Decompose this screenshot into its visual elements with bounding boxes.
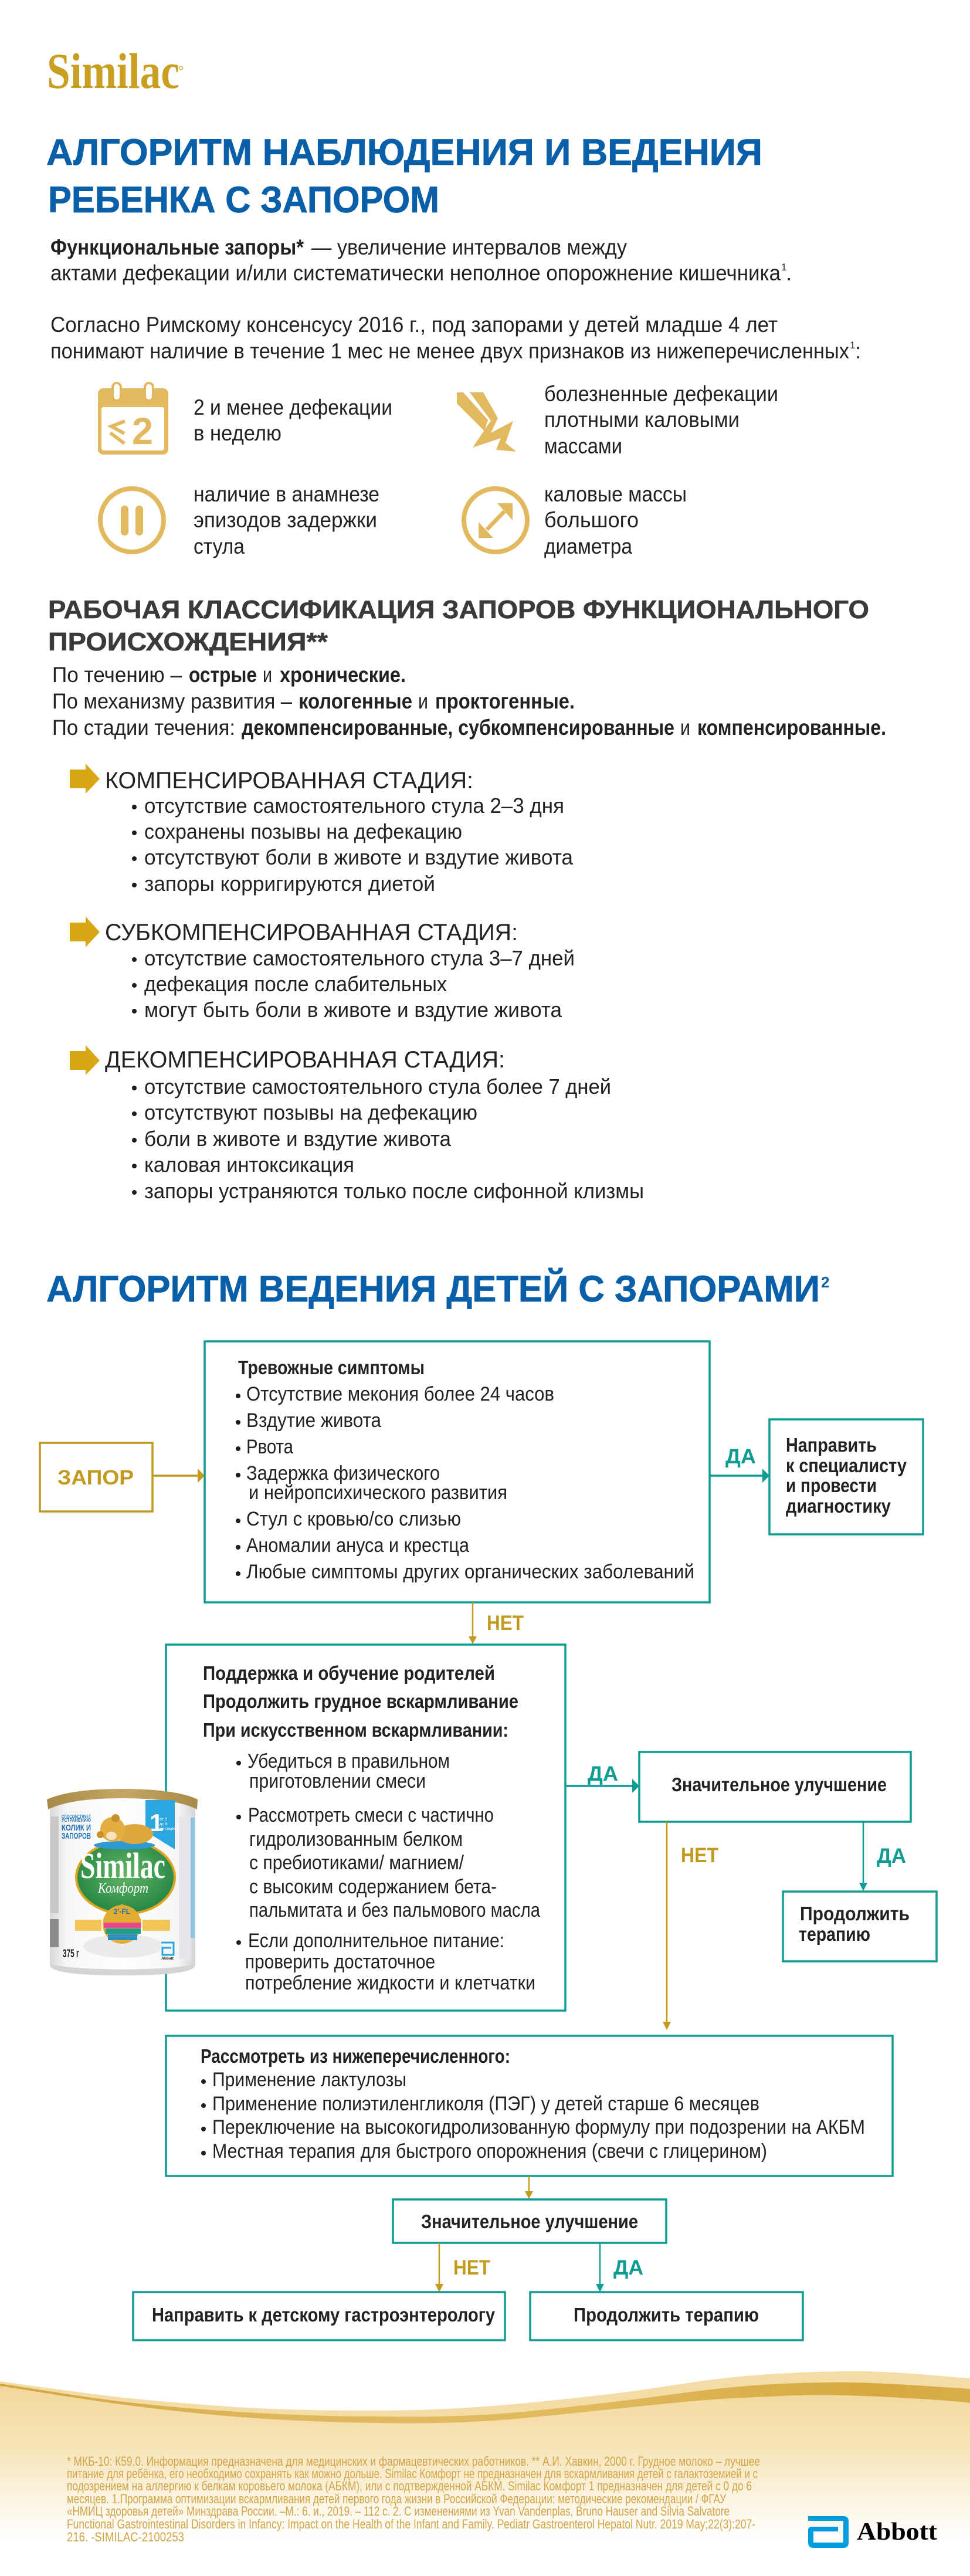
arrow: yes to continue therapy 2: ДА — [613, 2256, 643, 2279]
footnotes: Functional Gastrointestinal Disorders in Infancy: Impact on the Health of the Infant and Family. Pediatr Gastroenterol Hepatol Nutr. 2019 May;22(3):207- — [67, 2517, 755, 2531]
title: АЛГОРИТМ НАБЛЮДЕНИЯ И ВЕДЕНИЯ — [46, 132, 762, 173]
panel: consider options — [166, 2036, 893, 2176]
panel: parent support: с пребиотиками/ магнием/ — [249, 1852, 464, 1874]
panel: parent support: Рассмотреть смеси с частично — [248, 1804, 494, 1826]
panel: subcompensated stage: дефекация после слабительных — [144, 972, 447, 996]
image: Similac Comfort formula can: от 0 — [160, 1818, 167, 1822]
image: Similac Comfort formula can: ЗАПОРОВ — [62, 1831, 91, 1841]
arrow: yes to continue therapy: ДА — [877, 1845, 906, 1867]
image: Similac Comfort formula can: до 6 — [160, 1822, 168, 1826]
arrow: yes to continue therapy — [859, 1822, 906, 1891]
panel: alarm symptoms — [205, 1341, 710, 1602]
text block: Rome consensus: Согласно Римскому консенсусу 2016 г., под запорами у детей младше 4 лет — [50, 313, 778, 337]
icon: lightning — [457, 392, 516, 452]
text block: definition: Функциональные запоры* — [50, 235, 304, 259]
image: Similac Comfort formula can: Abbott — [161, 1956, 174, 1961]
panel: parent support: приготовлении смеси — [249, 1770, 426, 1792]
panel: parent support: Убедиться в правильном — [247, 1750, 450, 1772]
panel: compensated stage: КОМПЕНСИРОВАННАЯ СТАДИЯ: — [105, 768, 473, 794]
text block: definition: — увеличение интервалов между — [311, 235, 627, 259]
footnotes: * МКБ-10: К59.0. Информация предназначена для медицинских и фармацевтических работников. ** А.И. Хавкин, 2000 г. Грудное молоко – лучшее — [67, 2454, 760, 2469]
text: 2 or fewer — [194, 395, 392, 445]
panel: compensated stage — [70, 764, 574, 896]
text block: classification criteria: и — [263, 663, 272, 687]
panel: decompensated stage — [70, 1045, 644, 1203]
panel: alarm symptoms: Стул с кровью/со слизью — [246, 1508, 461, 1530]
panel: decompensated stage: отсутствие самостоятельного стула более 7 дней — [144, 1075, 611, 1099]
heading: management algorithm: АЛГОРИТМ ВЕДЕНИЯ ДЕТЕЙ С ЗАПОРАМИ — [46, 1268, 820, 1310]
arrow: stage marker — [70, 917, 100, 947]
arrow: no to parent support — [469, 1602, 524, 1644]
arrow: no to parent support: НЕТ — [487, 1612, 524, 1635]
panel: parent support: проверить достаточное — [245, 1951, 435, 1973]
footnotes: «НМИЦ здоровья детей» Минздрава России. –М.: 6. и., 2019. – 112 с. 2. С изменениями из Yvan Vandenplas, Bruno Hauser and Silvia Salvatore — [67, 2504, 730, 2519]
image: Similac Comfort formula can: 375 г — [63, 1948, 79, 1960]
text block: classification criteria: хронические. — [280, 663, 406, 687]
panel: decompensated stage: запоры устраняются только после сифонной клизмы — [144, 1179, 644, 1203]
text: delay episodes: эпизодов задержки — [194, 508, 377, 532]
text: large diameter: диаметра — [544, 534, 632, 558]
panel: parent support: пальмитата и без пальмового масла — [249, 1899, 540, 1921]
text: 2 or fewer: в неделю — [194, 421, 281, 445]
panel: parent support: Если дополнительное питание: — [248, 1930, 504, 1952]
logo: Abbott — [808, 2516, 937, 2548]
arrow: yes to specialist: ДА — [725, 1445, 756, 1468]
panel: subcompensated stage: отсутствие самостоятельного стула 3–7 дней — [144, 946, 575, 970]
panel: decompensated stage: ДЕКОМПЕНСИРОВАННАЯ СТАДИЯ: — [105, 1047, 505, 1073]
box: continue therapy 2 — [530, 2292, 803, 2340]
text block: Rome consensus: понимают наличие в течение 1 мес не менее двух признаков из нижеперечисленных — [50, 339, 849, 363]
footnotes: питание для ребёнка, его необходимо сохранять как можно дольше. Similac Комфорт не предназначен для вскармливания детей с галактоземией и с — [67, 2466, 758, 2481]
image: Similac Comfort formula can: 1 — [150, 1809, 163, 1836]
text block: definition: 1 — [781, 262, 786, 273]
panel: alarm symptoms: Задержка физического — [246, 1462, 440, 1484]
text: delay episodes — [194, 482, 379, 558]
box: continue therapy: Продолжить — [800, 1903, 910, 1924]
arrow: yes to improvement: ДА — [588, 1762, 618, 1785]
title — [46, 132, 762, 221]
panel: parent support: Продолжить грудное вскармливание — [203, 1690, 518, 1712]
panel: decompensated stage: отсутствуют позывы на дефекацию — [144, 1100, 477, 1124]
box: refer to specialist: диагностику — [786, 1495, 891, 1517]
box: constipation start: ЗАПОР — [57, 1466, 134, 1489]
box: significant improvement 2 — [393, 2199, 666, 2243]
icon: pause — [100, 489, 164, 552]
panel: alarm symptoms: Любые симптомы других органических заболеваний — [246, 1561, 694, 1583]
panel: parent support — [166, 1645, 565, 2011]
icon: calendar — [98, 383, 168, 455]
box: significant improvement: Значительное улучшение — [671, 1774, 887, 1795]
text block: classification criteria: декомпенсированные, субкомпенсированные — [242, 716, 674, 740]
image: Similac Comfort formula can: Similac — [80, 1846, 165, 1886]
arrow: stage marker — [70, 1045, 100, 1075]
text block: classification criteria: По механизму развития – — [52, 689, 292, 713]
panel: alarm symptoms: Рвота — [246, 1436, 293, 1458]
heading: management algorithm: 2 — [821, 1273, 829, 1291]
icon: diameter arrow — [464, 489, 527, 552]
panel: parent support: При искусственном вскармливании: — [203, 1719, 508, 1741]
panel: consider options: Применение лактулозы — [212, 2069, 406, 2091]
text: delay episodes: наличие в анамнезе — [194, 482, 379, 506]
image: Similac Comfort formula can: месяцев — [160, 1827, 176, 1831]
text block: definition: актами дефекации и/или систематически неполное опорожнение кишечника — [50, 261, 781, 285]
arrow: options to improvement — [525, 2176, 533, 2199]
arrow: no to further options — [663, 1822, 718, 2030]
panel: subcompensated stage: СУБКОМПЕНСИРОВАННАЯ СТАДИЯ: — [105, 920, 518, 945]
text block: classification criteria: и — [680, 716, 690, 740]
text block: Rome consensus: 1 — [850, 340, 855, 351]
text block: classification criteria: По стадии течения: — [52, 716, 235, 740]
panel: alarm symptoms: Тревожные симптомы — [238, 1357, 425, 1378]
arrow: yes to specialist — [710, 1445, 769, 1483]
text: large diameter: каловые массы — [544, 482, 687, 506]
panel: alarm symptoms: Отсутствие мекония более 24 часов — [246, 1383, 554, 1405]
panel: subcompensated stage: могут быть боли в животе и вздутие живота — [144, 998, 562, 1022]
panel: parent support: потребление жидкости и клетчатки — [245, 1972, 535, 1994]
heading: classification: ПРОИСХОЖДЕНИЯ** — [48, 628, 328, 656]
text: 2 or fewer: 2 и менее дефекации — [194, 395, 392, 419]
text block: definition: . — [786, 261, 792, 285]
box: continue therapy 2: Продолжить терапию — [574, 2304, 759, 2326]
arrow: no to further options: НЕТ — [681, 1844, 718, 1867]
box: refer to specialist: к специалисту — [786, 1455, 907, 1476]
text: large diameter: большого — [544, 508, 639, 532]
footnotes: месяцев. 1.Программа оптимизации вскармливания детей первого года жизни в Российской Федерации: методические рекомендации / ФГАУ — [67, 2492, 727, 2506]
text: delay episodes: стула — [194, 534, 245, 558]
panel: parent support: Поддержка и обучение родителей — [203, 1662, 495, 1684]
box: refer to gastroenterologist: Направить к детскому гастроэнтерологу — [152, 2304, 496, 2326]
panel: compensated stage: отсутствуют боли в животе и вздутие живота — [144, 845, 574, 869]
arrow: yes to improvement — [565, 1762, 639, 1793]
box: significant improvement 2: Значительное улучшение — [421, 2211, 638, 2232]
panel: consider options: Рассмотреть из нижеперечисленного: — [201, 2045, 510, 2067]
panel: consider options: Применение полиэтиленгликоля (ПЭГ) у детей старше 6 месяцев — [212, 2093, 759, 2115]
panel: compensated stage: сохранены позывы на дефекацию — [144, 819, 462, 843]
box: refer to specialist: Направить — [786, 1434, 877, 1456]
panel: parent support: с высоким содержанием бета- — [249, 1876, 497, 1898]
text block: Rome consensus: : — [855, 339, 861, 363]
panel: alarm symptoms: и нейропсихического развития — [249, 1482, 507, 1504]
panel: compensated stage: отсутствие самостоятельного стула 2–3 дня — [144, 794, 564, 818]
arrow: no to gastroenterologist — [435, 2243, 490, 2292]
box: significant improvement — [639, 1752, 911, 1822]
image: Similac Comfort formula can: УСТРАНЕНИЮ — [62, 1817, 91, 1823]
text block: classification criteria: кологенные — [299, 689, 412, 713]
text block: classification criteria: и — [418, 689, 428, 713]
box: refer to specialist — [769, 1419, 923, 1534]
heading: classification: РАБОЧАЯ КЛАССИФИКАЦИЯ ЗАПОРОВ ФУНКЦИОНАЛЬНОГО — [48, 595, 869, 624]
text: painful defecation: плотными каловыми — [544, 408, 740, 432]
text block: classification criteria: острые — [189, 663, 257, 687]
arrow: no to gastroenterologist: НЕТ — [453, 2256, 490, 2279]
image: Similac Comfort formula can — [47, 1789, 198, 1975]
panel: subcompensated stage — [70, 917, 575, 1022]
text: large diameter — [544, 482, 687, 558]
logo: Abbott: Abbott — [857, 2519, 937, 2546]
box: continue therapy — [783, 1892, 937, 1961]
image: Similac Comfort formula can: Комфорт — [97, 1881, 148, 1896]
box: refer to specialist: и провести — [786, 1475, 877, 1496]
text: painful defecation: массами — [544, 434, 622, 458]
panel: consider options: Переключение на высокогидролизованную формулу при подозрении на АКБМ — [212, 2116, 865, 2138]
text block: classification criteria: проктогенные. — [435, 689, 575, 713]
text block: classification criteria: компенсированные. — [697, 716, 886, 740]
arrow: yes to continue therapy 2 — [596, 2243, 643, 2292]
arrow: constipation to alarm symptoms — [152, 1469, 205, 1483]
image: Similac Comfort formula can: КОЛИК И — [62, 1823, 91, 1833]
text block: definition — [50, 235, 792, 285]
footer wave background — [0, 2371, 970, 2576]
panel: decompensated stage: каловая интоксикация — [144, 1153, 354, 1177]
panel: alarm symptoms: Вздутие живота — [246, 1409, 381, 1432]
arrow: stage marker — [70, 764, 100, 794]
footnotes — [67, 2454, 760, 2544]
logo: Similac: Similac — [47, 43, 179, 99]
text: painful defecation — [544, 382, 778, 458]
title: РЕБЕНКА С ЗАПОРОМ — [48, 179, 439, 221]
text: painful defecation: болезненные дефекации — [544, 382, 778, 406]
panel: decompensated stage: боли в животе и вздутие живота — [144, 1127, 452, 1151]
box: refer to gastroenterologist — [133, 2292, 505, 2340]
panel: parent support: гидролизованным белком — [249, 1828, 463, 1850]
heading: classification — [48, 595, 869, 656]
icon: calendar: 2 — [132, 410, 153, 452]
box: constipation start — [40, 1443, 152, 1511]
panel: consider options: Местная терапия для быстрого опорожнения (свечи с глицерином) — [212, 2140, 767, 2163]
image: Similac Comfort formula can: СПОСОБСТВУЕТ — [62, 1814, 91, 1819]
text block: Rome consensus — [50, 313, 861, 363]
footnotes: 216. -SIMILAC-2100253 — [67, 2530, 184, 2544]
panel: alarm symptoms: Аномалии ануса и крестца — [246, 1534, 469, 1557]
box: continue therapy: терапию — [799, 1923, 870, 1945]
panel: compensated stage: запоры корригируются диетой — [144, 872, 435, 896]
text block: classification criteria: По течению – — [52, 663, 182, 687]
text block: classification criteria — [52, 663, 886, 740]
footnotes: подозрением на аллергию к белкам коровьего молока (АБКМ), или с подтвержденной АБКМ. Similac Комфорт 1 предназначен для детей с 0 до 6 — [67, 2479, 752, 2493]
image: Similac Comfort formula can: 2'-FL — [114, 1907, 130, 1916]
